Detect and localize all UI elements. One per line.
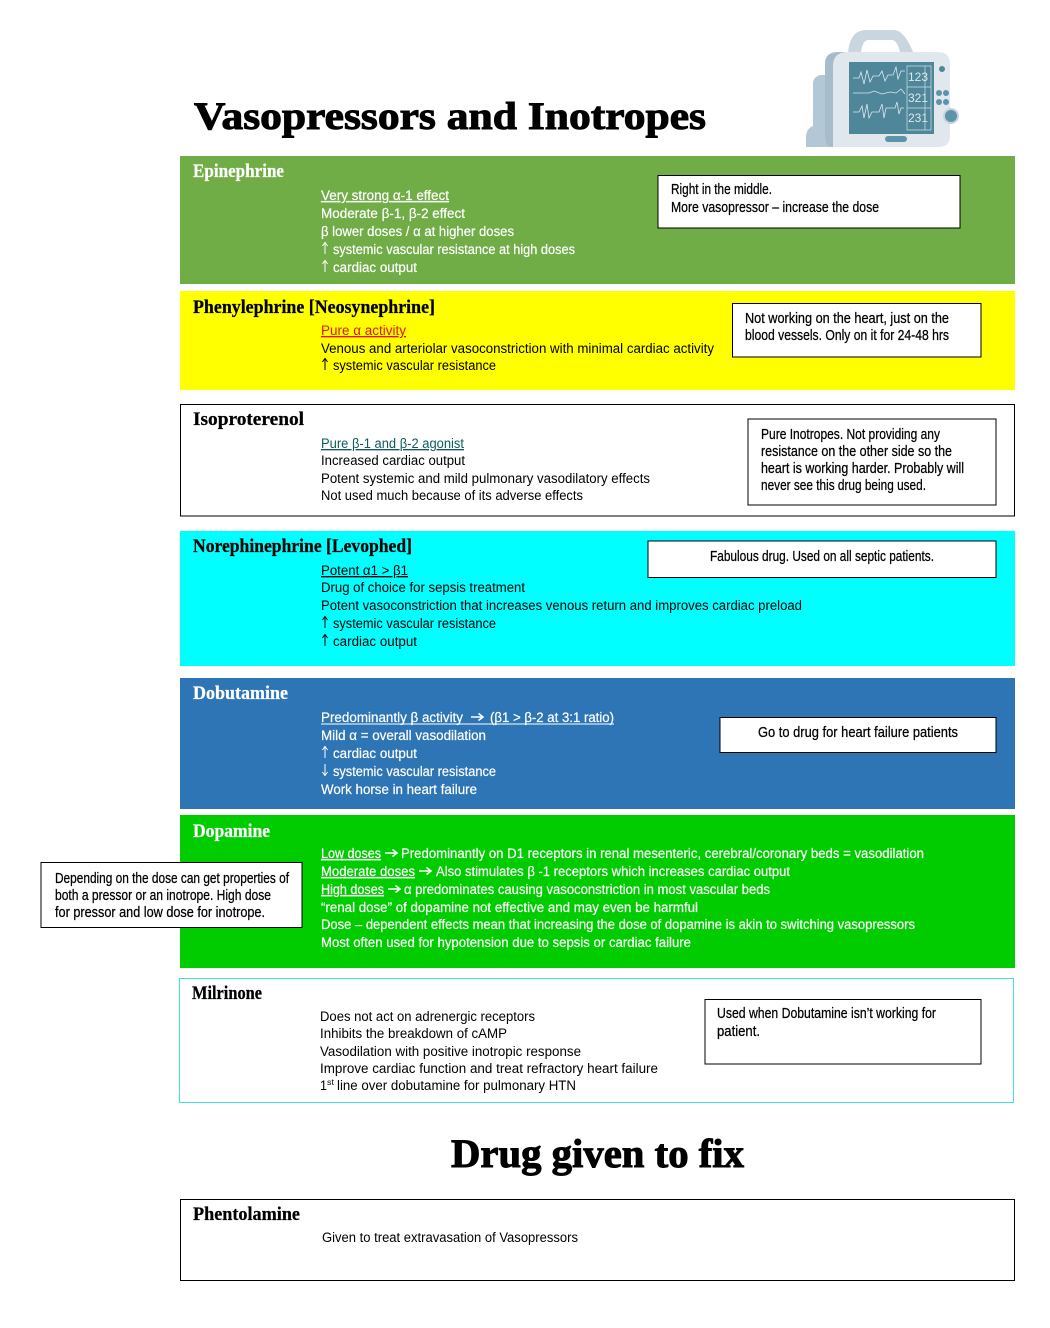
norepinephrine effects: Potent vasoconstriction that increases venous return and improves cardiac preload — [321, 598, 802, 613]
callout: phenylephrine: blood vessels. Only on it for 24-48 hrs — [745, 327, 949, 344]
panel: isoproterenol — [180, 404, 1014, 516]
panel: dobutamine — [180, 678, 1015, 809]
callout: epinephrine: Right in the middle. — [671, 181, 772, 198]
norepinephrine effects: cardiac output — [333, 634, 417, 649]
callout: dopamine: both a pressor or an inotrope. High dose — [55, 887, 271, 904]
dopamine effects: α predominates causing vasoconstriction in most vascular beds — [404, 882, 770, 897]
dopamine effects: Predominantly on D1 receptors in renal mesenteric, cerebral/coronary beds = vasodilation — [401, 846, 924, 861]
callout: norepinephrine — [648, 541, 996, 578]
heading: dopamine: Dopamine — [193, 822, 270, 842]
callout: dobutamine: Go to drug for heart failure patients — [758, 724, 958, 741]
heading: dobutamine: Dobutamine — [193, 684, 288, 704]
dopamine effects — [321, 846, 924, 950]
callout: isoproterenol: heart is working harder. Probably will — [761, 460, 964, 477]
heading: isoproterenol: Isoproterenol — [193, 410, 304, 430]
heading: milrinone: Milrinone — [192, 984, 262, 1004]
heading: epinephrine: Epinephrine — [193, 162, 284, 182]
epinephrine effects: Very strong α-1 effect — [321, 188, 449, 203]
heading: drug given to fix: Drug given to fix — [451, 1131, 744, 1176]
heading: phenylephrine: Phenylephrine [Neosynephrine] — [193, 298, 435, 318]
callout: dobutamine — [720, 718, 996, 752]
panel: phentolamine — [180, 1200, 1014, 1280]
callout: milrinone — [705, 1000, 981, 1064]
heading: phentolamine: Phentolamine — [193, 1205, 300, 1225]
icon: patient monitor: 231 — [908, 111, 928, 125]
panel: dopamine — [180, 815, 1015, 968]
callout: dopamine: Depending on the dose can get properties of — [55, 870, 290, 887]
panel: phenylephrine — [180, 291, 1015, 390]
milrinone effects: line over dobutamine for pulmonary HTN — [337, 1078, 576, 1093]
norepinephrine effects: Potent α1 > β1 — [321, 563, 408, 578]
epinephrine effects: Moderate β-1, β-2 effect — [321, 206, 465, 221]
dopamine effects: Moderate doses — [321, 864, 415, 879]
phenylephrine effects — [321, 323, 714, 373]
norepinephrine effects — [321, 563, 802, 649]
callout: milrinone: patient. — [717, 1023, 760, 1040]
milrinone effects: Does not act on adrenergic receptors — [320, 1009, 535, 1024]
dobutamine effects — [321, 710, 614, 797]
isoproterenol effects: Potent systemic and mild pulmonary vasodilatory effects — [321, 471, 650, 486]
milrinone effects: Inhibits the breakdown of cAMP — [320, 1026, 507, 1041]
isoproterenol effects — [321, 436, 650, 503]
callout: phenylephrine: Not working on the heart, just on the — [745, 310, 949, 327]
isoproterenol effects: Increased cardiac output — [321, 453, 465, 468]
epinephrine effects: cardiac output — [333, 260, 417, 275]
milrinone effects: 1 — [320, 1078, 327, 1093]
panel: epinephrine — [180, 156, 1015, 284]
callout: epinephrine — [658, 176, 960, 228]
callout: isoproterenol — [748, 419, 996, 505]
title: Vasopressors and Inotropes — [194, 95, 706, 138]
dobutamine effects: Work horse in heart failure — [321, 782, 477, 797]
callout: norepinephrine: Fabulous drug. Used on all septic patients. — [710, 548, 934, 565]
norepinephrine effects: systemic vascular resistance — [333, 616, 496, 631]
heading: norepinephrine: Norephinephrine [Levophed] — [193, 537, 412, 557]
dopamine effects: Low doses — [321, 846, 381, 861]
milrinone effects: st — [327, 1078, 335, 1087]
icon: patient monitor: 321 — [908, 91, 928, 105]
dopamine effects: Most often used for hypotension due to sepsis or cardiac failure — [321, 935, 691, 950]
milrinone effects: Improve cardiac function and treat refractory heart failure — [320, 1061, 658, 1076]
callout: isoproterenol: Pure Inotropes. Not providing any — [761, 426, 940, 443]
callout: milrinone: Used when Dobutamine isn’t working for — [717, 1005, 936, 1022]
phenylephrine effects: Venous and arteriolar vasoconstriction with minimal cardiac activity — [321, 341, 714, 356]
epinephrine effects — [321, 188, 575, 275]
dopamine effects: “renal dose” of dopamine not effective and may even be harmful — [321, 900, 698, 915]
dopamine effects: Also stimulates β -1 receptors which increases cardiac output — [436, 864, 790, 879]
callout: dopamine: for pressor and low dose for inotrope. — [55, 904, 265, 921]
dobutamine effects: (β1 > β-2 at 3:1 ratio) — [490, 710, 614, 725]
panel: milrinone — [180, 978, 1014, 1102]
isoproterenol effects: Not used much because of its adverse effects — [321, 488, 583, 503]
callout: isoproterenol: resistance on the other side so the — [761, 443, 952, 460]
isoproterenol effects: Pure β-1 and β-2 agonist — [321, 436, 464, 451]
milrinone effects: Vasodilation with positive inotropic response — [320, 1044, 581, 1059]
dobutamine effects: Predominantly β activity — [321, 710, 463, 725]
dobutamine effects: cardiac output — [333, 746, 417, 761]
epinephrine effects: systemic vascular resistance at high doses — [333, 242, 575, 257]
callout: isoproterenol: never see this drug being used. — [761, 477, 926, 494]
phenylephrine effects: systemic vascular resistance — [333, 358, 496, 373]
panel: norepinephrine — [180, 531, 1015, 666]
phentolamine effect: Given to treat extravasation of Vasopressors — [322, 1230, 578, 1245]
milrinone effects — [320, 1009, 658, 1093]
callout: phenylephrine — [732, 304, 981, 357]
dopamine effects: High doses — [321, 882, 384, 897]
icon: patient monitor — [806, 30, 958, 147]
dobutamine effects: systemic vascular resistance — [333, 764, 496, 779]
callout: epinephrine: More vasopressor – increase the dose — [671, 199, 879, 216]
phenylephrine effects: Pure α activity — [321, 323, 406, 338]
dobutamine effects: Mild α = overall vasodilation — [321, 728, 486, 743]
norepinephrine effects: Drug of choice for sepsis treatment — [321, 580, 525, 595]
callout: dopamine — [41, 862, 302, 928]
icon: patient monitor: 123 — [908, 70, 928, 84]
dopamine effects: Dose – dependent effects mean that increasing the dose of dopamine is akin to switching vasopressors — [321, 917, 915, 932]
epinephrine effects: β lower doses / α at higher doses — [321, 224, 514, 239]
